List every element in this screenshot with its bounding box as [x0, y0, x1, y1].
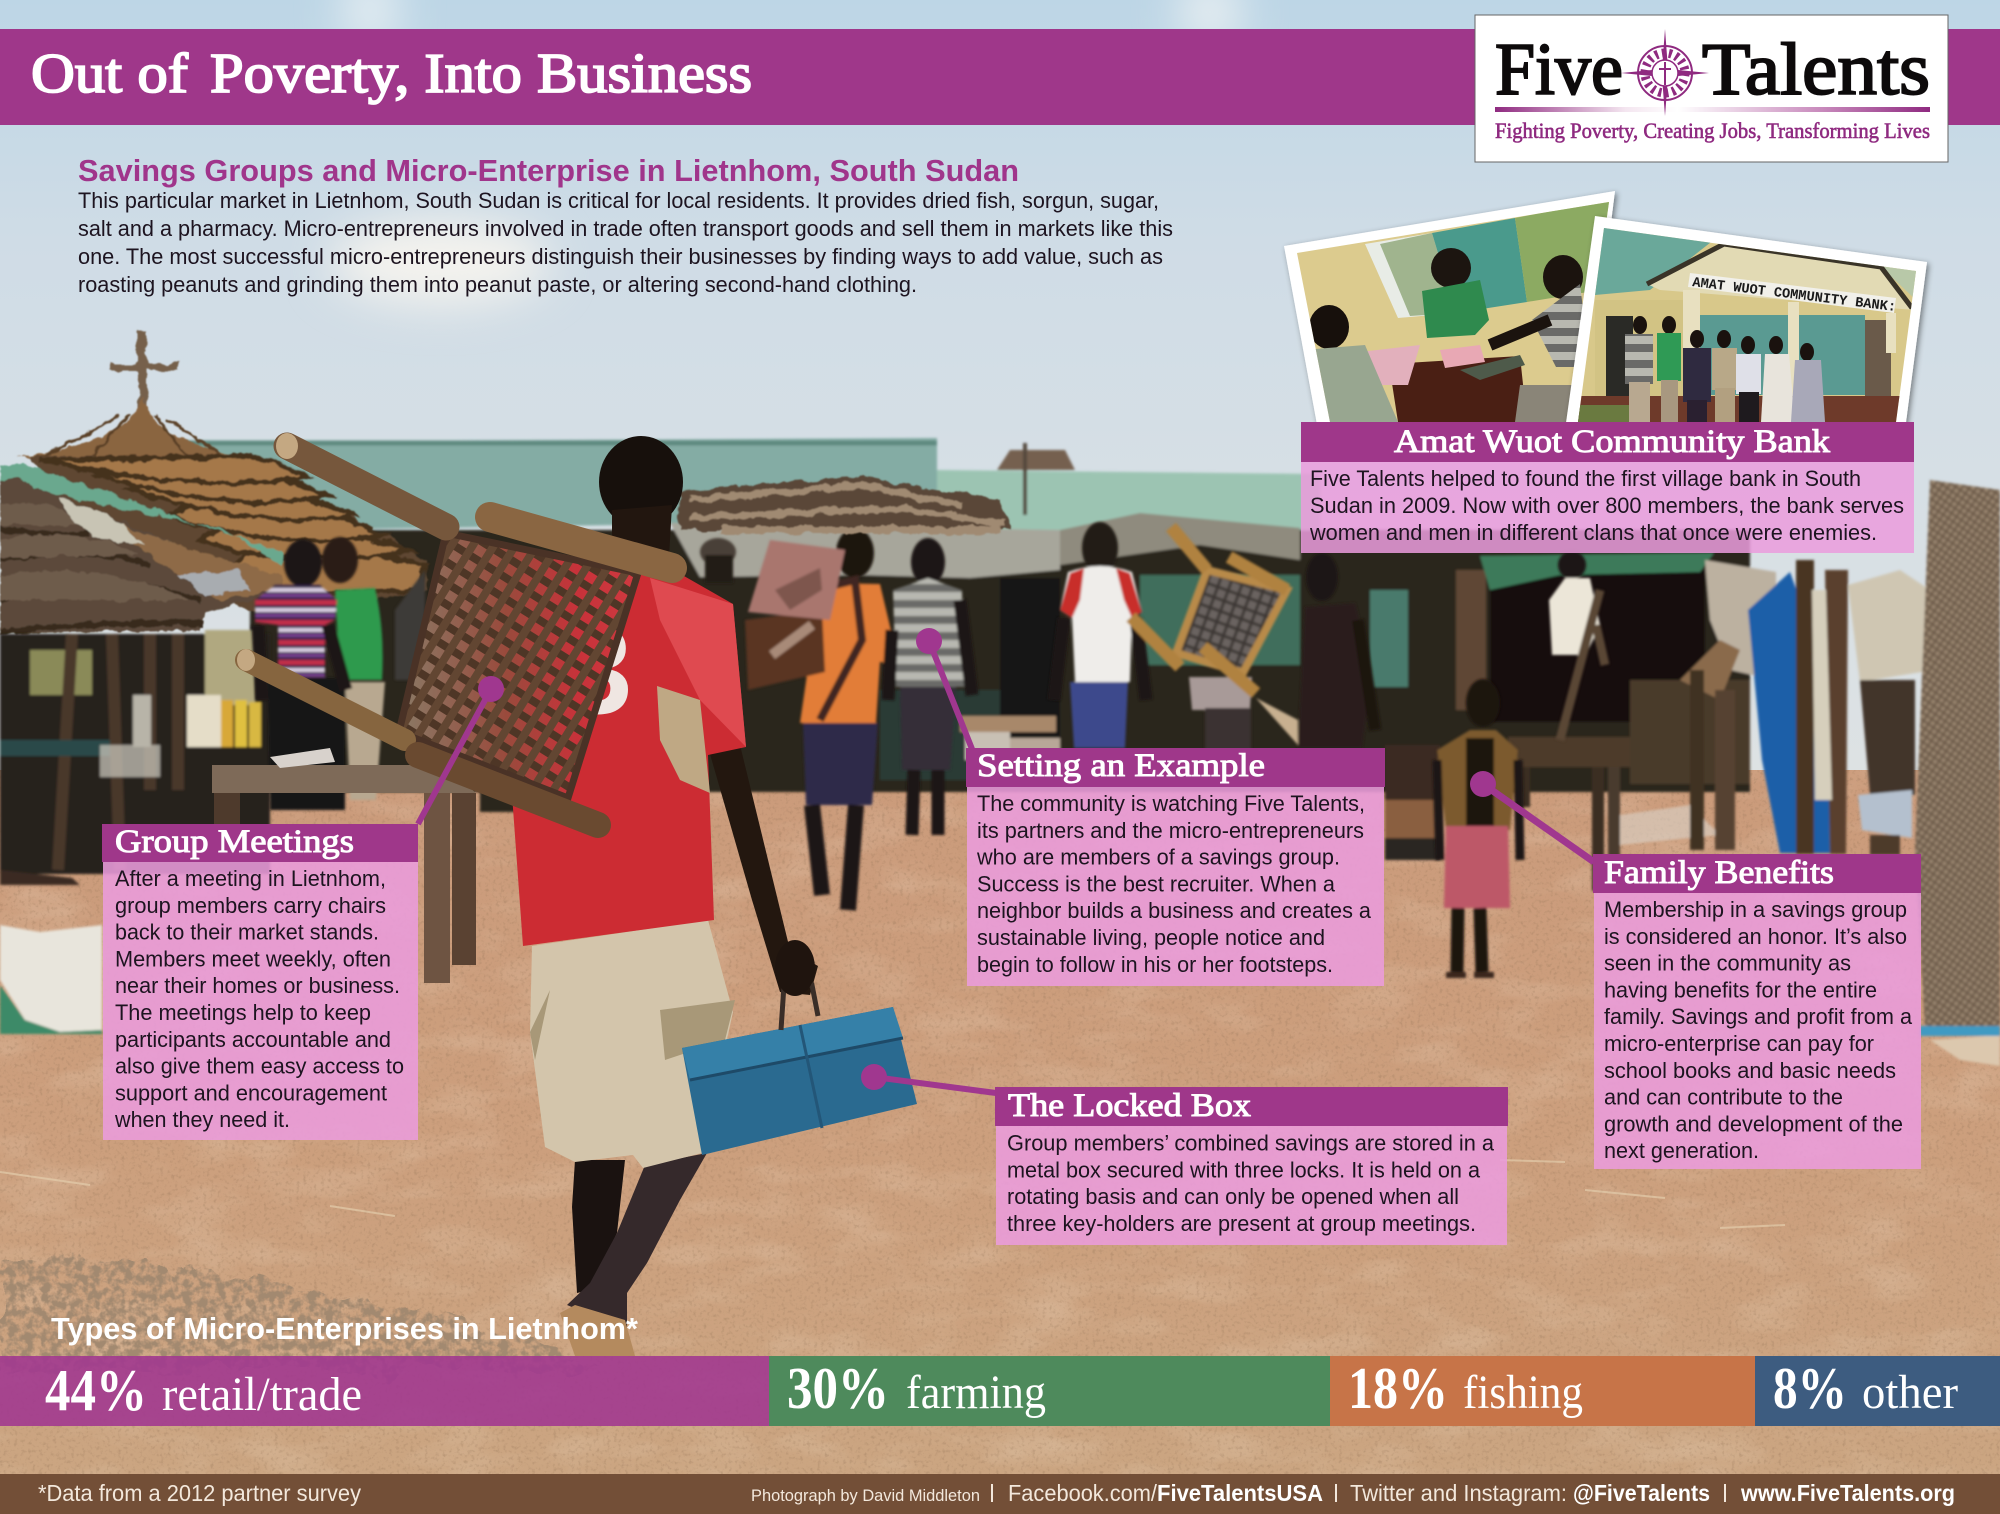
- panel: Group Meetings: [102, 824, 418, 1140]
- panel: Setting an Example: Setting an Example: [977, 748, 1265, 784]
- logo panel: Five Talents: Talents: [1702, 29, 1930, 111]
- panel: Group Meetings: group members carry chairs: [115, 893, 386, 918]
- panel: Family Benefits: growth and development of the: [1604, 1111, 1903, 1136]
- panel: Amat Wuot Community Bank: women and men in different clans that once were enemies.: [1309, 520, 1877, 545]
- panel: The Locked Box: metal box secured with three locks. It is held on a: [1007, 1157, 1480, 1182]
- callout pointer: group meetings: [418, 676, 504, 824]
- background market people: [255, 522, 1605, 975]
- panel: Group Meetings: near their homes or business.: [115, 973, 400, 998]
- logo panel: Five Talents: Five: [1495, 29, 1623, 111]
- bar segment: 30% farming: farming: [906, 1366, 1046, 1419]
- panel: Setting an Example: who are members of a savings group.: [976, 845, 1340, 870]
- panel: Setting an Example: [966, 748, 1385, 986]
- ground debris: [0, 1160, 1785, 1400]
- callout pointer: locked box: [861, 1064, 996, 1093]
- panel: Family Benefits: Family Benefits: [1604, 855, 1834, 891]
- heading: types of micro-enterprises: Types of Micro-Enterprises in Lietnhom*: [51, 1311, 639, 1346]
- credits and social links: Twitter and Instagram:: [1350, 1480, 1567, 1506]
- panel: Family Benefits: school books and basic needs: [1604, 1058, 1896, 1083]
- man carrying chair and cash box: 3: [563, 601, 633, 740]
- bar segment: 44% retail/trade: retail/trade: [162, 1368, 362, 1421]
- intro paragraph: [78, 188, 1173, 297]
- panel: Family Benefits: [1593, 854, 1921, 1169]
- logo panel: Five Talents: [1475, 15, 1948, 162]
- callout pointer: family benefits: [1470, 771, 1594, 862]
- panel: Group Meetings: The meetings help to keep: [115, 1000, 371, 1025]
- panel: Setting an Example: Success is the best recruiter. When a: [977, 871, 1335, 896]
- credits and social links: @FiveTalents: [1573, 1480, 1710, 1506]
- title: [31, 43, 752, 105]
- panel: The Locked Box: rotating basis and can only be opened when all: [1007, 1184, 1459, 1209]
- panel: Setting an Example: begin to follow in his or her footsteps.: [977, 952, 1333, 977]
- panel: Group Meetings: After a meeting in Lietnhom,: [115, 866, 386, 891]
- title: Poverty, Into Business: [210, 43, 752, 105]
- icon: compass star with cross: [1621, 29, 1709, 116]
- survey footnote: *Data from a 2012 partner survey: [38, 1480, 361, 1506]
- credits and social links: www.FiveTalents.org: [1740, 1480, 1955, 1506]
- panel: Family Benefits: Membership in a savings group: [1604, 897, 1907, 922]
- bar segment: 30% farming: 30%: [787, 1355, 889, 1421]
- panel: Group Meetings: participants accountable and: [115, 1027, 391, 1052]
- bar segment: 30% farming: [769, 1355, 1330, 1426]
- panel: Family Benefits: family. Savings and profit from a: [1604, 1004, 1912, 1029]
- bar segment: 8% other: [1755, 1355, 2000, 1426]
- panel: Group Meetings: Members meet weekly, often: [115, 946, 391, 971]
- intro text block: [78, 153, 1173, 297]
- panel: Setting an Example: its partners and the micro-entrepreneurs: [977, 818, 1364, 843]
- bar segment: 44% retail/trade: [0, 1356, 769, 1426]
- panel: The Locked Box: Group members’ combined savings are stored in a: [1007, 1130, 1494, 1156]
- panel: Group Meetings: back to their market stands.: [115, 920, 379, 945]
- bar segment: 18% fishing: [1330, 1355, 1755, 1426]
- photo: Amat Wuot Community Bank building: [1565, 216, 1927, 430]
- panel: The Locked Box: The Locked Box: [1008, 1088, 1252, 1124]
- footer bar: [0, 1474, 2000, 1514]
- credits and social links: Facebook.com/: [1008, 1480, 1158, 1506]
- panel: Amat Wuot Community Bank: [1301, 422, 1914, 553]
- panel: Family Benefits: micro-enterprise can pay for: [1604, 1031, 1874, 1056]
- credits and social links: FiveTalentsUSA: [1157, 1480, 1323, 1506]
- intro paragraph: This particular market in Lietnhom, South Sudan is critical for local residents. It provides dried fish, sorgun, sugar,: [78, 188, 1159, 213]
- callout lines and dots: [418, 628, 1594, 1093]
- credits and social links: Photograph by David Middleton: [751, 1486, 980, 1505]
- log pile roof: [680, 477, 1012, 530]
- credits and social links: [751, 1480, 1955, 1506]
- title: Out of: [31, 43, 188, 105]
- panel: Amat Wuot Community Bank: Sudan in 2009. Now with over 800 members, the bank serves: [1310, 493, 1904, 518]
- panel: Family Benefits: and can contribute to the: [1604, 1085, 1843, 1110]
- photo: bank meeting: [1284, 191, 1620, 430]
- man carrying chair and cash box: [237, 433, 917, 1356]
- bar segment: 8% other: other: [1862, 1366, 1958, 1419]
- panel: Setting an Example: The community is watching Five Talents,: [977, 791, 1365, 816]
- panel: Family Benefits: seen in the community as: [1604, 951, 1851, 976]
- panel: Group Meetings: when they need it.: [114, 1107, 290, 1132]
- panel: Family Benefits: having benefits for the entire: [1604, 977, 1877, 1002]
- bar segment: 8% other: 8%: [1773, 1355, 1847, 1421]
- stacked bar chart: micro-enterprise shares: [0, 1355, 2000, 1426]
- panel: Group Meetings: Group Meetings: [115, 824, 354, 860]
- thatched huts: [0, 332, 427, 634]
- panel: Group Meetings: also give them easy access to: [115, 1054, 404, 1079]
- intro paragraph: one. The most successful micro-entrepreneurs distinguish their businesses by finding ways to add value, such as: [78, 244, 1163, 269]
- panel: The Locked Box: three key-holders are present at group meetings.: [1007, 1211, 1476, 1236]
- bar segment: 44% retail/trade: 44%: [45, 1357, 147, 1423]
- foreground table: [212, 748, 476, 983]
- intro paragraph: roasting peanuts and grinding them into peanut paste, or altering second-hand clothing.: [78, 272, 917, 297]
- panel: Family Benefits: is considered an honor. It’s also: [1604, 924, 1907, 949]
- panel: Amat Wuot Community Bank: Amat Wuot Community Bank: [1394, 424, 1831, 460]
- intro heading: Savings Groups and Micro-Enterprise in Lietnhom, South Sudan: [78, 153, 1019, 188]
- panel: Amat Wuot Community Bank: Five Talents helped to found the first village bank in South: [1310, 466, 1861, 491]
- title bar: [0, 29, 2000, 125]
- tagline: Fighting Poverty, Creating Jobs, Transforming Lives: [1495, 118, 1930, 143]
- panel: Setting an Example: sustainable living, people notice and: [977, 925, 1325, 950]
- panel: The Locked Box: [995, 1087, 1508, 1245]
- bar segment: 18% fishing: fishing: [1463, 1366, 1583, 1419]
- bar segment: 18% fishing: 18%: [1348, 1355, 1448, 1421]
- callout pointer: setting an example: [916, 628, 972, 749]
- panel: Setting an Example: neighbor builds a business and creates a: [977, 898, 1371, 923]
- panel: Family Benefits: next generation.: [1604, 1138, 1759, 1163]
- panel: Group Meetings: support and encouragement: [115, 1080, 388, 1105]
- bank sign text: AMAT WUOT COMMUNITY BANK:: [1691, 275, 1897, 316]
- intro paragraph: salt and a pharmacy. Micro-entrepreneurs involved in trade often transport goods and sell them in markets like this: [78, 216, 1173, 241]
